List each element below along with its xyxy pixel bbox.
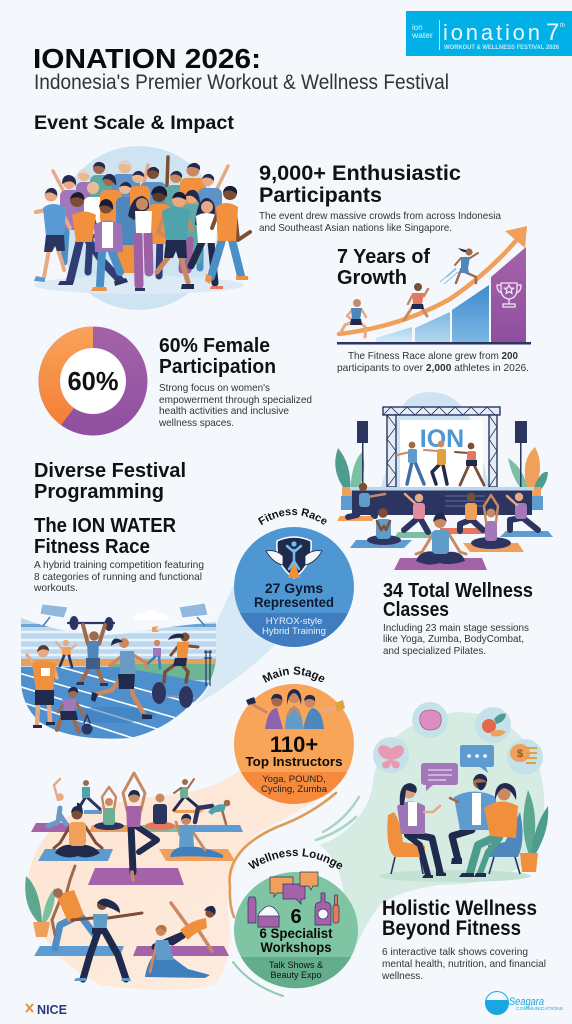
plants (335, 447, 548, 510)
logo: Seagara Communications (485, 992, 563, 1015)
warrior pose woman (72, 899, 142, 981)
stat: 60% female text: Strong focus on women's (159, 383, 270, 394)
badge circle: fitness race: 27 Gyms (265, 580, 323, 596)
heading: diverse programming: Programming (34, 481, 164, 503)
text: 34 wellness classes: Including 23 main stage sessions (383, 623, 529, 634)
seated blue woman right (170, 814, 223, 858)
text: fitness race: A hybrid training competition featuring (34, 560, 204, 571)
connector blob: race to circle (195, 575, 275, 705)
heading: diverse programming (34, 460, 186, 503)
runner 2 (404, 283, 428, 320)
badge circle: fitness race: Represented (254, 594, 334, 610)
logo: NICE: NICE (37, 1002, 67, 1017)
stat: 9,000+ participants: Participants (259, 184, 382, 207)
front person: blue shirt man (34, 188, 70, 282)
badge circle: main stage: Main Stage (262, 666, 324, 683)
main meditator (416, 509, 466, 565)
illustration: main stage and yoga (335, 392, 553, 570)
logo: Seagara Communications: COMMUNICATIONS (516, 1006, 563, 1011)
back row people (53, 157, 228, 276)
blob: mint background (320, 712, 544, 945)
stadium details (27, 603, 212, 734)
heading: diverse programming: Diverse Festival (34, 460, 186, 482)
stat: 60% female text: Participation (159, 356, 276, 378)
small runners (56, 640, 161, 668)
badge circle: wellness lounge: 6 Specialist (260, 926, 333, 941)
truss and screen (383, 407, 500, 487)
thought bubbles (373, 702, 543, 791)
stat: 9,000+ participants: 9,000+ Enthusiastic (259, 162, 461, 185)
side bend figure (52, 866, 95, 948)
truss and screen: ION (420, 425, 464, 453)
badge circle: wellness lounge: Beauty Expo (270, 970, 322, 980)
chart: growth bars with arrow (337, 226, 531, 344)
donut chart: 60% female: 60% (68, 366, 118, 396)
badge circle: fitness race: HYROX-style (266, 616, 322, 627)
stat: 9,000+ participants (259, 162, 501, 234)
badge circle: main stage: 110+ (270, 732, 318, 757)
stat: 9,000+ participants: and Southeast Asian nations like Singapore. (259, 223, 452, 234)
main woman runner (91, 638, 152, 719)
logo: ionation 7th: 7 (546, 19, 559, 46)
text: holistic wellness: mental health, nutrition, and financial (382, 959, 546, 970)
middle row people (84, 171, 202, 273)
icon: chat bubbles (270, 872, 318, 904)
badge circle: fitness race (234, 508, 354, 647)
text: fitness race: workouts. (33, 583, 78, 594)
floodlights (40, 603, 208, 626)
donut chart: 60% female (38, 326, 148, 436)
front person: orange shirt man (58, 192, 128, 286)
text: holistic wellness: wellness. (381, 971, 423, 982)
cloud (133, 610, 170, 620)
heading: event scale: Event Scale & Impact (34, 113, 235, 134)
plant left (25, 876, 55, 937)
badge circle: wellness lounge (234, 848, 358, 988)
runner with bib (27, 645, 57, 728)
text: 34 wellness classes (383, 580, 533, 657)
meditating woman (54, 803, 102, 857)
badge circle: main stage: Yoga, POUND, (262, 774, 326, 785)
text: 34 wellness classes: like Yoga, Zumba, BodyCombat, (383, 634, 524, 645)
badge circle: wellness lounge: Workshops (260, 940, 332, 955)
front person: teal shirt man (157, 192, 194, 289)
text: fitness race: The ION WATER (34, 515, 177, 537)
badge circle: wellness lounge: Talk Shows & (269, 960, 323, 970)
icon: beauty products (248, 893, 339, 927)
logo: Seagara Communications: Seagara (509, 996, 544, 1008)
lifter (68, 616, 114, 686)
caption: fitness race growth: The Fitness Race alone grew from 200 (348, 351, 518, 362)
text: 34 wellness classes: Classes (383, 599, 449, 621)
title: IONATION 2026: (33, 43, 261, 74)
text: holistic wellness: 6 interactive talk shows covering (382, 947, 528, 958)
badge circle: wellness lounge: Wellness Lounge (248, 848, 342, 869)
text: 34 wellness classes: and specialized Pilates. (383, 646, 486, 657)
blob: peach background (28, 770, 335, 990)
yoga mats (337, 516, 553, 570)
stat: 60% female text (158, 335, 312, 429)
floor barbell (150, 682, 196, 708)
man in blue jacket (450, 774, 496, 864)
speakers (357, 421, 527, 490)
stat: 60% female text: health activities and inclusive (159, 406, 289, 417)
caption: fitness race growth (337, 351, 529, 374)
text: 34 wellness classes: 34 Total Wellness (383, 580, 533, 602)
illustration: wellness talk show (373, 702, 548, 882)
plant right (520, 790, 548, 872)
badge circle: fitness race: Hybrid Training (262, 626, 326, 637)
title (33, 43, 449, 94)
participants doing yoga (348, 483, 538, 549)
text: holistic wellness: Beyond Fitness (382, 917, 521, 940)
logo: ionation 7th: ion (412, 23, 423, 32)
logo: ionation 7th: WORKOUT & WELLNESS FESTIVAL 2026 (444, 45, 560, 51)
front person: central woman (128, 196, 152, 291)
logo: ionation 7th: water (411, 30, 433, 40)
caption: fitness race growth: participants to over 2,000 athletes in 2026. (337, 363, 529, 374)
badge circle: main stage: Top Instructors (246, 754, 342, 769)
runner 3 (440, 248, 478, 284)
stat: 60% female text: empowerment through specialized (159, 395, 312, 406)
text: fitness race (33, 515, 204, 594)
badge circle: main stage (234, 666, 354, 804)
logo: ionation 7th: ionation (443, 20, 540, 45)
text: fitness race: Fitness Race (34, 536, 150, 558)
stat: 7 years heading: 7 Years of (337, 246, 430, 268)
runner 1 (341, 299, 366, 337)
logo: ionation 7th (406, 11, 572, 56)
stat: 9,000+ participants: The event drew massive crowds from across Indonesia (259, 211, 501, 222)
stage deck (352, 490, 532, 515)
logo: ionation 7th: th (560, 23, 565, 29)
stat: 60% female text: 60% Female (159, 335, 270, 357)
illustration: yoga group (25, 773, 243, 981)
stat: 7 years heading (337, 246, 430, 289)
tree pose woman (123, 773, 157, 880)
illustration: crowd of participants (34, 146, 250, 310)
illustration: fitness race stadium (21, 618, 216, 739)
seated forward woman (145, 925, 210, 978)
back row figures (48, 779, 230, 830)
text: holistic wellness (381, 897, 546, 982)
left woman on orange chair (387, 783, 446, 878)
crouching woman (57, 687, 92, 734)
icon: winged shield (266, 537, 322, 578)
icon: trophy (497, 283, 521, 307)
badge circle: wellness lounge: 6 (290, 906, 302, 928)
arrow (339, 238, 520, 337)
text: fitness race: 8 categories of running and functional (34, 572, 202, 583)
stat: 60% female text: wellness spaces. (158, 418, 234, 429)
text: holistic wellness: Holistic Wellness (382, 897, 537, 920)
bow pose figure (155, 903, 216, 951)
yoga mats (31, 810, 243, 956)
stage instructors (397, 441, 484, 485)
badge circle: fitness race: Fitness Race (258, 508, 327, 526)
front person: orange shirt man right (205, 186, 250, 284)
decorative swooshes (230, 793, 359, 996)
front person: white shirt woman (191, 198, 223, 289)
post (204, 650, 212, 686)
front person: purple jacket woman (91, 199, 123, 291)
stat: 7 years heading: Growth (337, 267, 407, 289)
thought bubbles: $ (517, 748, 523, 760)
badge circle: main stage: Cycling, Zumba (261, 784, 328, 795)
right woman on blue chair (459, 783, 523, 877)
three instructors (246, 689, 345, 729)
title: Indonesia's Premier Workout & Wellness Festival (34, 71, 449, 94)
orange runner (164, 632, 198, 682)
